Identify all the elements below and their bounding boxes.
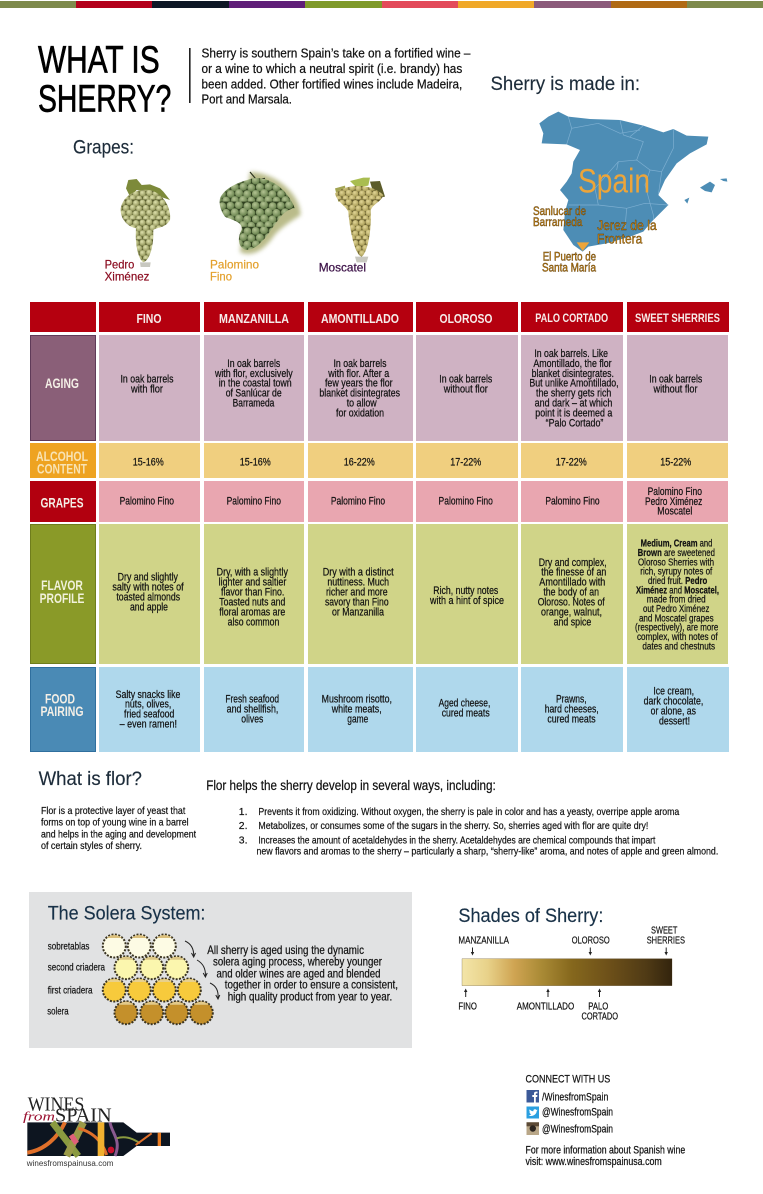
- map of Spain: Sanlucar de: [533, 206, 586, 218]
- intro text: Sherry is southern Spain’s take on a fortified wine –: [202, 46, 470, 60]
- row: food pairing: Fresh seafood: [225, 694, 279, 706]
- row: food pairing: dessert!: [659, 715, 690, 727]
- solera description: together in order to ensure a consistent,: [225, 979, 398, 992]
- intro text: Port and Marsala.: [202, 92, 292, 106]
- solera tier labels: second criadera: [48, 963, 105, 974]
- row: flavor profile: floral aromas are: [219, 606, 285, 618]
- row: aging: blanket disintegrates.: [532, 368, 614, 380]
- row: alcohol content: ALCOHOL: [36, 448, 88, 464]
- row: aging: few years the flor: [325, 378, 393, 390]
- connect with us: visit: www.winesfromspainusa.com: [526, 1156, 662, 1168]
- row: food pairing: [30, 667, 729, 752]
- row: food pairing: Aged cheese,: [439, 698, 490, 710]
- row: flavor profile: Dry and complex,: [539, 557, 607, 569]
- row: aging: in the coastal town: [219, 378, 292, 390]
- row: flavor profile: Rich, nutty notes: [433, 585, 498, 597]
- text: flor definition: Flor is a protective layer of yeast that: [41, 806, 185, 817]
- row: food pairing: – even ramen!: [120, 719, 177, 731]
- row: aging: for oxidation: [336, 408, 384, 420]
- row: flavor profile: also common: [228, 616, 279, 628]
- solera description: solera aging process, whereby younger: [213, 956, 382, 969]
- row: flavor profile: Medium, Cream and: [641, 539, 712, 550]
- map of Spain: Frontera: [597, 230, 642, 246]
- solera description: and older wines are aged and blended: [216, 967, 380, 980]
- connect with us: CONNECT WITH US: [526, 1074, 611, 1086]
- solera flow arrows: [185, 941, 220, 999]
- row: flavor profile: complex, with notes of: [637, 632, 718, 643]
- row: alcohol content: 17-22%: [450, 456, 482, 468]
- map of Spain: Jerez de la: [597, 217, 657, 233]
- row: grapes: Palomino Fino: [439, 495, 493, 507]
- row: flavor profile: (respectively), are more: [635, 623, 719, 634]
- shades labels below: CORTADO: [582, 1011, 618, 1022]
- row: aging: to allow: [347, 398, 377, 410]
- row: alcohol content: CONTENT: [37, 460, 87, 476]
- row: alcohol content: 15-16%: [240, 456, 271, 468]
- row: food pairing: cured meats: [547, 713, 596, 725]
- solera description: [207, 944, 398, 1003]
- row: food pairing: Prawns,: [556, 694, 587, 706]
- row: flavor profile: lighter and saltier: [219, 576, 287, 588]
- row: aging: without flor: [653, 383, 698, 395]
- shades labels below: FINO: [458, 1002, 477, 1013]
- row: aging: In oak barrels: [120, 374, 174, 386]
- row: grapes: Pedro Ximénez: [645, 496, 702, 508]
- row: aging: In oak barrels: [439, 374, 492, 386]
- row: aging: without flor: [443, 383, 488, 395]
- row: aging: with flor, exclusively: [214, 368, 293, 380]
- table: header row: OLOROSO: [440, 311, 492, 326]
- icon: facebook: [526, 1090, 539, 1102]
- row: flavor profile: Toasted nuts and: [219, 596, 285, 608]
- grape: pedro ximenez: [105, 179, 170, 284]
- table: header row: SWEET SHERRIES: [635, 311, 720, 325]
- row: alcohol content: [30, 443, 728, 478]
- solera description: All sherry is aged using the dynamic: [207, 944, 364, 957]
- solera tier labels: solera: [47, 1006, 69, 1017]
- row: food pairing: Mushroom risotto,: [322, 694, 392, 706]
- row: food pairing: olives: [241, 713, 263, 725]
- row: aging: point it is deemed a: [535, 407, 612, 419]
- map of Spain: [533, 112, 727, 275]
- row: flavor profile: and apple: [130, 601, 168, 613]
- row: food pairing: Ice cream,: [653, 685, 694, 697]
- shades labels above: MANZANILLA: [458, 935, 509, 946]
- row: food pairing: dark chocolate,: [644, 695, 703, 707]
- solera barrels: [103, 934, 213, 1024]
- row: flavor profile: richer and more: [326, 586, 388, 598]
- row: flavor profile: Amontillado with: [539, 577, 605, 589]
- title: [38, 39, 171, 121]
- logo: wines from spain: winesfromspainusa.com: [26, 1159, 114, 1168]
- row: flavor profile: Brown are sweetened: [638, 548, 715, 559]
- row: flavor profile: dates and chestnuts: [642, 641, 715, 652]
- intro text: been added. Other fortified wines include Madeira,: [202, 77, 462, 91]
- shades labels above: SWEET: [651, 925, 678, 936]
- row: grapes: Palomino Fino: [648, 486, 702, 498]
- shades labels above: [458, 925, 685, 946]
- logo: wines from spain: [23, 1094, 170, 1168]
- row: flavor profile: dried fruit. Pedro: [648, 576, 707, 587]
- row: flavor profile: Dry with a distinct: [323, 567, 394, 579]
- row: aging: In oak barrels: [649, 374, 702, 386]
- table: header row: MANZANILLA: [219, 311, 289, 326]
- row: flavor profile: the body of an: [543, 586, 599, 598]
- row: grapes: [30, 481, 728, 522]
- grape: palomino fino: Palomino: [210, 257, 259, 271]
- row: alcohol content: 17-22%: [556, 456, 587, 468]
- list: flor benefits: 2.: [239, 821, 247, 832]
- row: food pairing: nuts, olives,: [125, 699, 171, 711]
- logo: wines from spain: WINES: [28, 1094, 84, 1116]
- row: flavor profile: PROFILE: [40, 590, 84, 606]
- row: flavor profile: rich, syrupy notes of: [640, 567, 712, 578]
- row: flavor profile: Oloroso. Notes of: [538, 596, 605, 608]
- connect with us: [526, 1074, 685, 1168]
- row: aging: AGING: [45, 375, 79, 391]
- icon: instagram: [526, 1122, 539, 1135]
- row: aging: “Palo Cortado”: [546, 417, 604, 429]
- row: aging: Amontillado, the flor: [533, 358, 612, 370]
- grape: pedro ximenez: Pedro: [105, 257, 135, 271]
- chart: shades gradient bar: [458, 925, 685, 1022]
- solera tier labels: [47, 941, 105, 1017]
- shades labels below: PALO: [588, 1002, 608, 1013]
- grape: pedro ximenez: Ximénez: [105, 270, 149, 284]
- row: grapes: Palomino Fino: [120, 495, 174, 507]
- top colour bar: [0, 1, 763, 8]
- map of Spain: Santa María: [542, 263, 597, 275]
- heading: grapes: Grapes:: [73, 137, 134, 158]
- shades labels above: SHERRIES: [647, 935, 685, 946]
- row: flavor profile: the finesse of an: [541, 567, 606, 579]
- row: food pairing: white meats,: [331, 703, 382, 715]
- title divider: [189, 48, 191, 103]
- row: flavor profile: nuttiness. Much: [327, 576, 389, 588]
- list: flor benefits: Prevents it from oxidizing. Without oxygen, the sherry is pale in color and has a yeasty, overripe apple aroma: [258, 807, 679, 818]
- row: food pairing: or alone, as: [651, 705, 696, 717]
- row: aging: of Sanlúcar de: [226, 388, 282, 400]
- solera tier labels: sobretablas: [48, 941, 90, 952]
- list: flor benefits: 1.: [239, 807, 247, 818]
- row: aging: In oak barrels: [227, 358, 280, 370]
- row: aging: and dark – at which: [535, 398, 612, 410]
- row: grapes: Palomino Fino: [227, 495, 281, 507]
- row: food pairing: PAIRING: [40, 703, 84, 719]
- row: aging: blanket disintegrates: [319, 388, 400, 400]
- row: aging: the sherry gets rich: [536, 388, 611, 400]
- connect with us: For more information about Spanish wine: [526, 1144, 685, 1156]
- map of Spain: Spain: [578, 162, 650, 200]
- title: SHERRY?: [38, 79, 171, 121]
- icon: twitter: [526, 1106, 539, 1118]
- row: flavor profile: and spice: [554, 616, 591, 628]
- row: grapes: Palomino Fino: [545, 495, 600, 507]
- row: flavor profile: FLAVOR: [41, 577, 83, 593]
- panel: solera system: [29, 892, 412, 1048]
- shades labels below: AMONTILLADO: [517, 1002, 574, 1013]
- row: food pairing: Salty snacks like: [116, 689, 180, 701]
- row: flavor profile: orange, walnut,: [541, 606, 602, 618]
- heading: shades of sherry: Shades of Sherry:: [458, 906, 603, 927]
- title: WHAT IS: [38, 39, 160, 81]
- row: flavor profile: salty with notes of: [112, 581, 184, 593]
- grape: palomino fino: Fino: [210, 270, 232, 284]
- text: flor definition: [41, 806, 196, 852]
- list: flor benefits: Metabolizes, or consumes some of the sugars in the sherry. So, sherries aged with flor are quite dry!: [258, 821, 648, 832]
- map of Spain: El Puerto de: [543, 252, 596, 264]
- row: aging: with flor. After a: [327, 368, 389, 380]
- row: flavor profile: toasted almonds: [116, 591, 180, 603]
- row: aging: But unlike Amontillado,: [529, 378, 619, 390]
- table: header row: AMONTILLADO: [321, 311, 399, 326]
- row: food pairing: game: [347, 713, 368, 725]
- row: aging: [30, 335, 728, 441]
- row: food pairing: hard cheeses,: [545, 703, 599, 715]
- row: food pairing: and shellfish,: [227, 703, 278, 715]
- connect with us: /WinesfromSpain: [542, 1092, 608, 1104]
- row: aging: In oak barrels: [334, 358, 386, 370]
- text: flor definition: forms on top of young wine in a barrel: [41, 818, 189, 829]
- row: alcohol content: 15-22%: [660, 456, 692, 468]
- table: header row: PALO CORTADO: [535, 311, 608, 325]
- row: food pairing: fried seafood: [124, 709, 174, 721]
- intro text: or a wine to which a neutral spirit (i.e. brandy) has: [202, 62, 462, 76]
- solera tier labels: first criadera: [48, 985, 93, 996]
- row: alcohol content: 15-16%: [133, 456, 164, 468]
- row: flavor profile: [30, 524, 728, 664]
- shades arrows: [464, 948, 668, 997]
- heading: solera: The Solera System:: [48, 903, 205, 924]
- text: flor definition: and helps in the aging and development: [41, 829, 196, 840]
- row: alcohol content: 16-22%: [344, 456, 375, 468]
- grape: moscatel: Moscatel: [319, 261, 366, 275]
- row: flavor profile: with a hint of spice: [429, 595, 504, 607]
- intro text: [202, 46, 470, 106]
- row: flavor profile: made from dried: [647, 595, 706, 606]
- logo: wines from spain: from: [23, 1109, 55, 1124]
- row: flavor profile: savory than Fino: [325, 596, 389, 608]
- row: grapes: Moscatel: [657, 506, 692, 518]
- solera description: high quality product from year to year.: [228, 990, 392, 1003]
- row: food pairing: FOOD: [45, 691, 75, 707]
- heading: sherry is made in: Sherry is made in:: [490, 74, 640, 95]
- table: header row: FINO: [136, 311, 162, 326]
- row: flavor profile: and Moscatel grapes: [639, 613, 714, 624]
- grape: moscatel: [319, 178, 385, 275]
- row: food pairing: cured meats: [442, 707, 490, 719]
- connect with us: @WinesfromSpain: [542, 1123, 613, 1135]
- row: flavor profile: flavor than Fino.: [221, 586, 284, 598]
- row: flavor profile: or Manzanilla: [332, 606, 384, 618]
- shades labels above: OLOROSO: [572, 935, 610, 946]
- text: flor definition: of certain styles of sherry.: [41, 841, 142, 852]
- row: grapes: GRAPES: [40, 495, 84, 511]
- connect with us: @WinesfromSpain: [542, 1107, 613, 1119]
- map of Spain: Barrameda: [533, 217, 583, 229]
- row: flavor profile: Oloroso Sherries with: [638, 557, 714, 568]
- heading: what is flor: What is flor?: [39, 769, 142, 790]
- row: flavor profile: out Pedro Ximénez: [643, 604, 709, 615]
- row: grapes: Palomino Fino: [331, 495, 385, 507]
- list: flor benefits: 3.: [239, 835, 247, 846]
- heading: flor helps: Flor helps the sherry develop in several ways, including:: [206, 778, 496, 793]
- row: flavor profile: Dry and slightly: [118, 572, 179, 584]
- list: flor benefits: [239, 807, 718, 858]
- row: aging: Barrameda: [233, 398, 274, 410]
- row: flavor profile: Dry, with a slightly: [217, 567, 289, 579]
- shades labels below: [458, 1002, 618, 1022]
- table: header row: [30, 302, 729, 332]
- row: flavor profile: Ximénez and Moscatel,: [636, 585, 719, 596]
- row: aging: with flor: [130, 383, 163, 395]
- logo: wines from spain: SPAIN: [55, 1105, 112, 1127]
- grape: palomino fino: [210, 172, 301, 284]
- row: aging: In oak barrels. Like: [534, 348, 608, 360]
- list: flor benefits: Increases the amount of acetaldehydes in the sherry. Acetaldehydes are chemical compounds that impart: [258, 835, 655, 846]
